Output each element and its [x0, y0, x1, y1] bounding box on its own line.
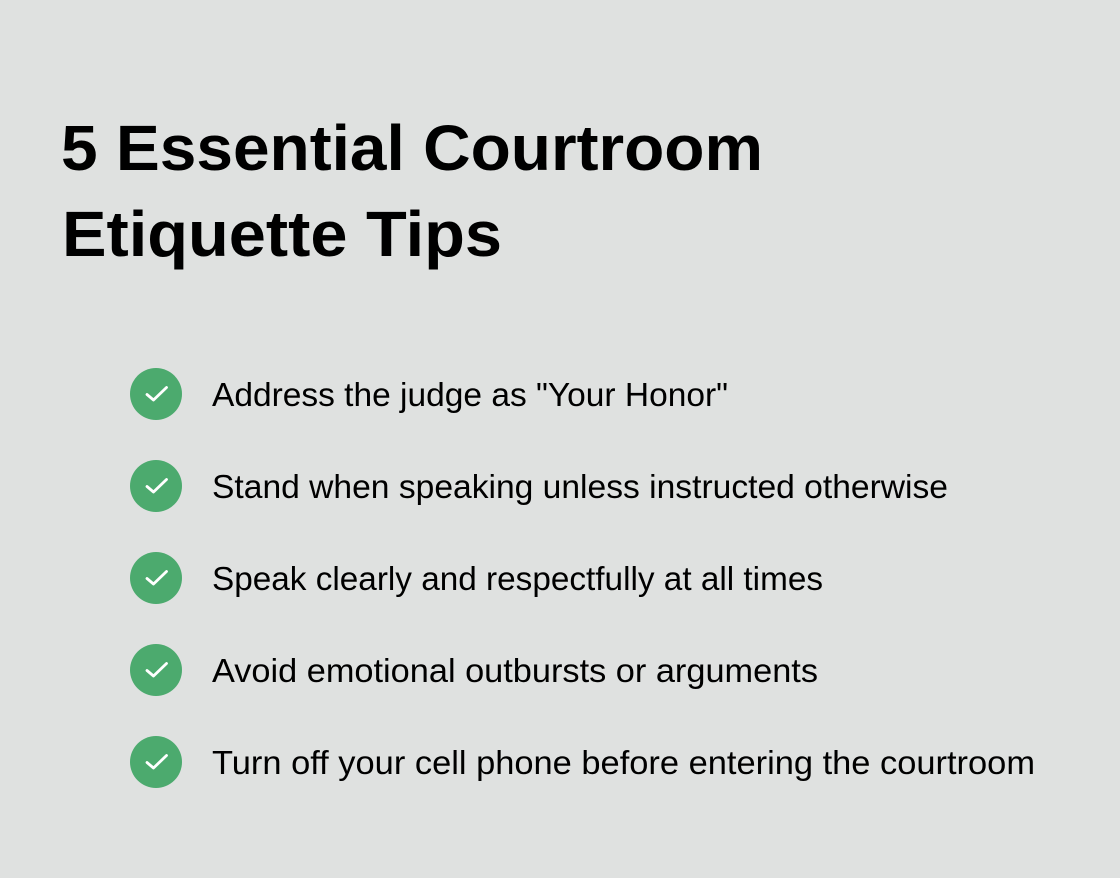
item 5	[130, 736, 1035, 788]
title: Etiquette Tips	[62, 198, 502, 270]
item 5: Turn off your cell phone before entering the courtroom	[212, 744, 1035, 781]
item 3	[130, 552, 823, 604]
item 4	[130, 644, 818, 696]
title: 5 Essential Courtroom	[61, 112, 763, 184]
item 2	[130, 460, 948, 512]
item 1	[130, 368, 728, 420]
title	[61, 112, 763, 270]
item 4: Avoid emotional outbursts or arguments	[212, 652, 818, 689]
checklist	[130, 368, 1035, 788]
item 1: Address the judge as "Your Honor"	[212, 376, 728, 413]
item 2: Stand when speaking unless instructed otherwise	[212, 468, 948, 505]
item 3: Speak clearly and respectfully at all times	[212, 560, 823, 597]
